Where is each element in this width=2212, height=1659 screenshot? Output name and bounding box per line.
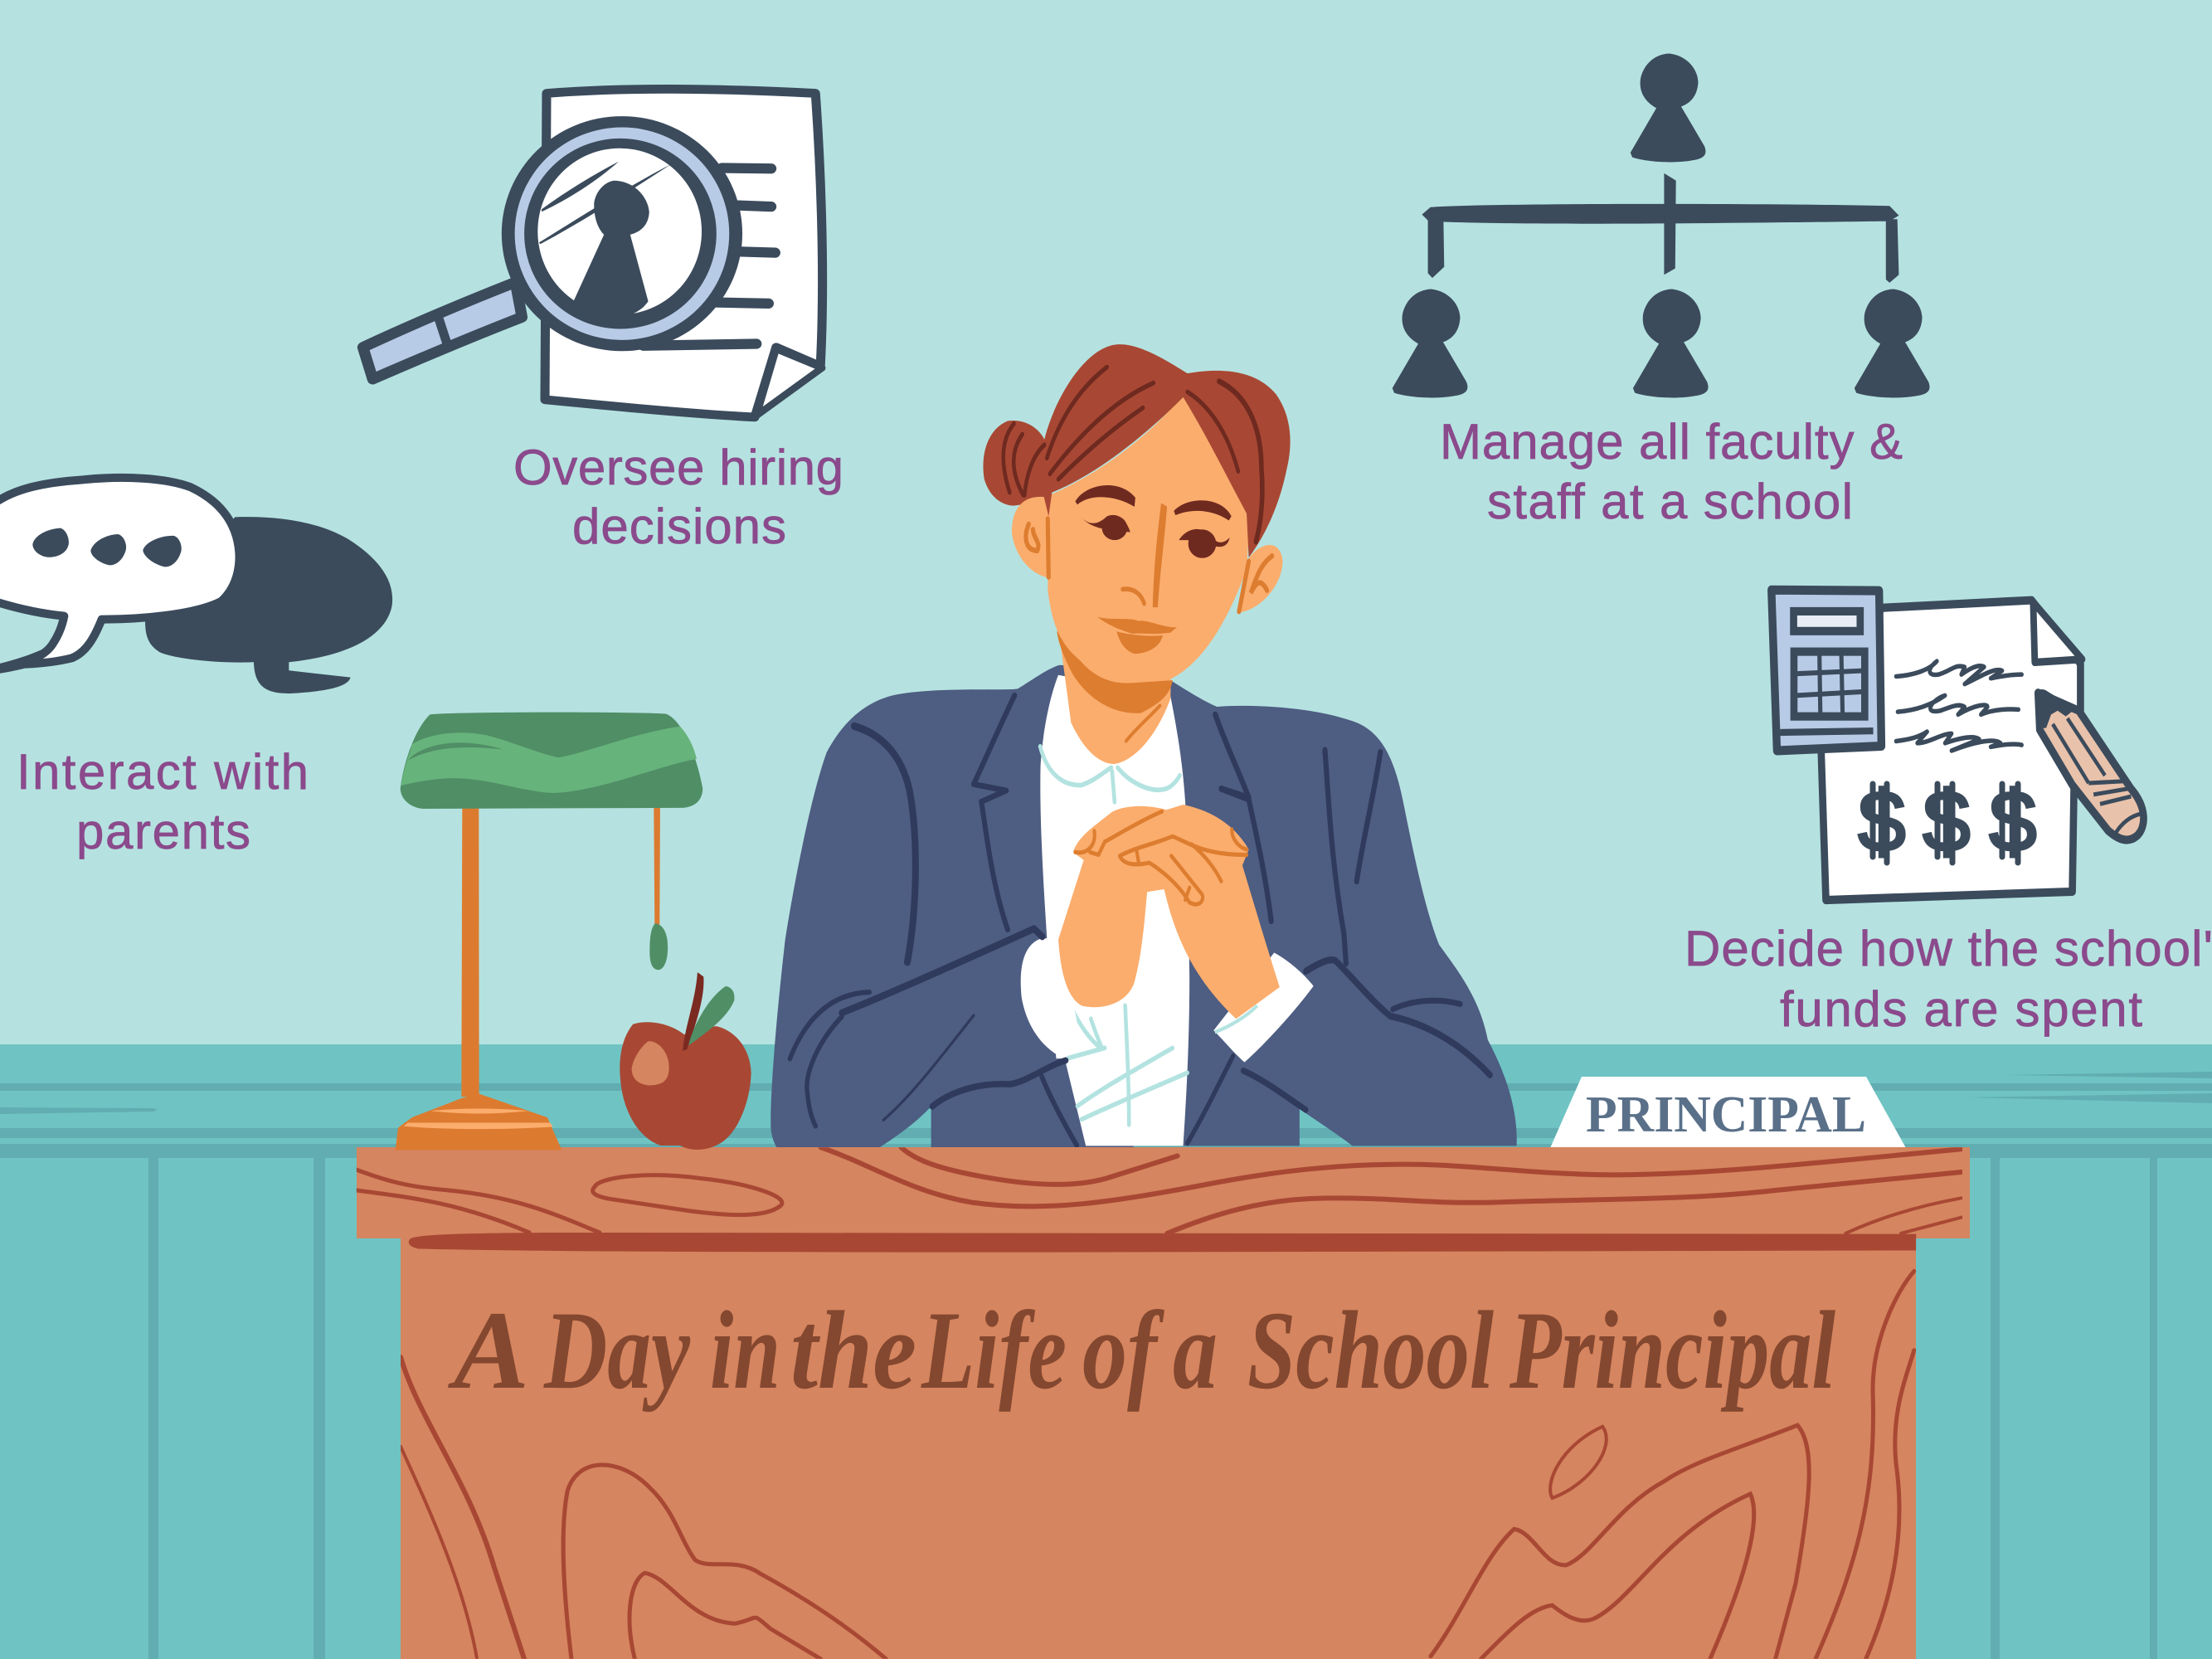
icon: magnifying glass over resume: [363, 89, 823, 417]
clasped hands: [1058, 805, 1280, 1019]
apple: [620, 972, 751, 1150]
icon: organization chart: [1393, 54, 1930, 397]
wood grain: [357, 1147, 1971, 1659]
caption: interact with parents: parents: [76, 804, 250, 859]
dollar signs: [1858, 774, 2037, 870]
left jacket and sleeve: [771, 665, 1134, 1148]
caption: oversee hiring decisions: decisions: [572, 499, 786, 554]
title: A: [448, 1289, 529, 1413]
caption: oversee hiring decisions: Oversee hiring: [513, 440, 843, 495]
desk: [357, 1147, 1971, 1659]
caption: decide how funds are spent: [1685, 921, 2212, 1037]
wainscot wall panel: [0, 1044, 2212, 1659]
caption: manage faculty and staff: staff at a school: [1487, 474, 1853, 529]
eyes: [1080, 515, 1230, 558]
caption: manage faculty and staff: Manage all faculty &: [1440, 414, 1903, 469]
title: a: [1173, 1289, 1218, 1413]
dollar signs: $: [1989, 774, 2037, 870]
face: [1048, 395, 1251, 682]
head with hair and face: [983, 344, 1291, 682]
eyebrows: [1075, 485, 1135, 507]
budget paper: [1821, 601, 2082, 900]
title: Day: [543, 1289, 691, 1413]
jacket fold lines right: [1188, 715, 1490, 1143]
ear details: [1026, 519, 1272, 611]
pull cord: [654, 808, 660, 925]
tassel: [649, 923, 668, 970]
hair bun: [983, 421, 1050, 506]
desk lamp: [396, 713, 702, 1150]
nose: [1153, 503, 1167, 607]
caption: interact with parents: [17, 744, 309, 859]
right jacket and sleeve: [997, 665, 1517, 1146]
dollar signs: $: [1858, 774, 1906, 870]
caption: decide how funds are spent: funds are spent: [1780, 981, 2142, 1037]
neck: [1057, 621, 1173, 764]
icon: speech bubble: [0, 478, 392, 693]
icon: budget sheet, calculator and pencil: [1772, 590, 2144, 900]
caption: oversee hiring decisions: [513, 440, 843, 554]
title: School: [1247, 1289, 1494, 1413]
left cuff: [1021, 937, 1078, 1059]
lamp pole: [461, 806, 479, 1097]
hair: [1043, 344, 1291, 557]
dollar signs: $: [1923, 774, 1971, 870]
shirt: [1040, 675, 1189, 1146]
title: Life: [921, 1289, 1067, 1413]
desk top: [357, 1147, 1970, 1238]
jacket fold lines left: [790, 695, 1077, 1146]
title: [448, 1289, 1835, 1413]
caption: manage faculty and staff: [1440, 414, 1903, 529]
calculator: [1772, 590, 1881, 751]
lamp base: [396, 1094, 562, 1150]
title: the: [790, 1289, 916, 1413]
right cuff: [1213, 953, 1314, 1063]
title: in: [710, 1289, 780, 1413]
ears: [1012, 497, 1050, 578]
principal figure: [771, 344, 1517, 1148]
pencil: [2036, 689, 2144, 840]
title: of: [1082, 1289, 1165, 1413]
name placard: [1550, 1077, 1906, 1148]
title: Principal: [1509, 1289, 1835, 1413]
name placard: PRINCIPAL: [1586, 1087, 1866, 1143]
lamp shade: [401, 713, 702, 809]
mouth: [1097, 617, 1177, 634]
desk body: [401, 1238, 1916, 1659]
caption: interact with parents: Interact with: [17, 744, 309, 800]
